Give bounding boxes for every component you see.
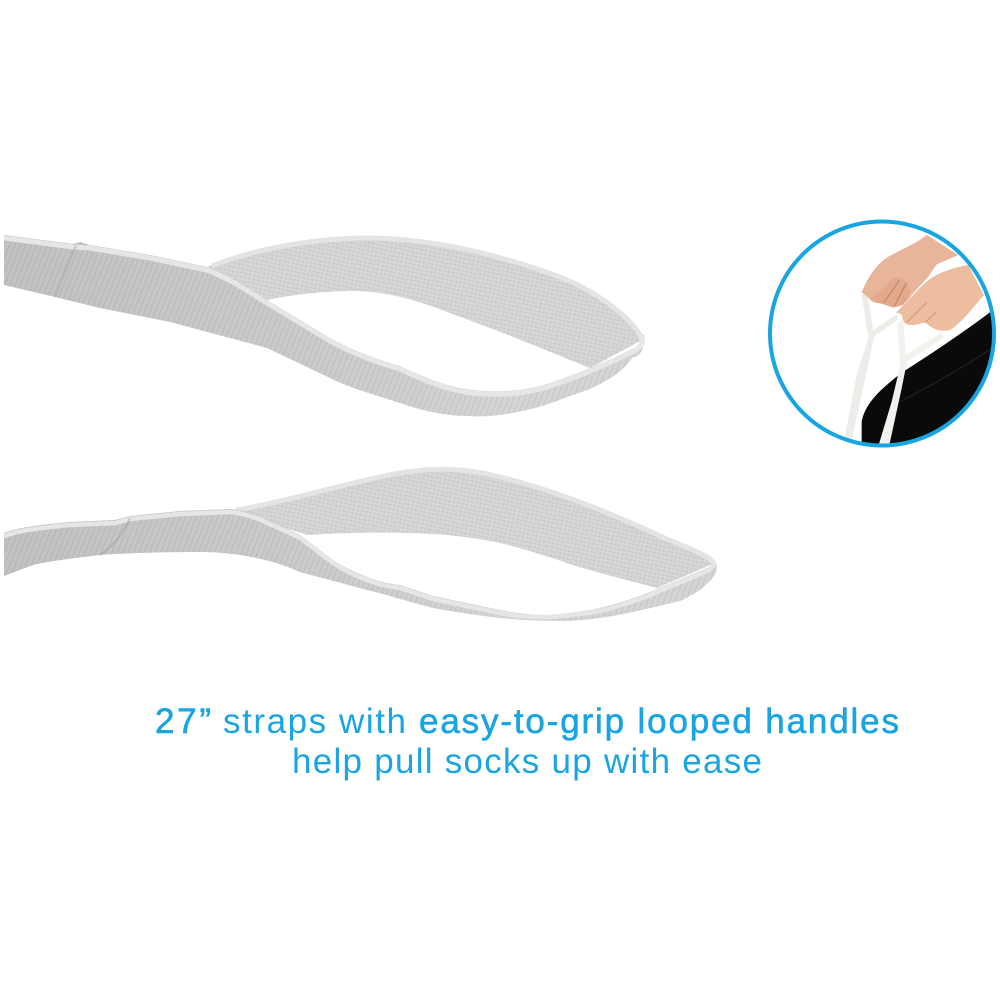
inset circle ring <box>770 222 994 446</box>
back arm and hand <box>862 235 958 307</box>
left strap <box>845 293 898 439</box>
front arm and hand <box>896 265 984 331</box>
caption line 1: 27” <box>155 702 211 741</box>
strap loop: bottom <box>4 468 717 621</box>
back band of bottom loop <box>232 468 715 588</box>
caption line 1: straps with <box>223 702 406 741</box>
seat cushion <box>862 311 1000 448</box>
caption line 1 <box>155 702 899 741</box>
inset photo: hands pulling straps <box>770 222 1000 448</box>
front band of top loop <box>4 235 644 416</box>
caption line 1: easy-to-grip looped handles <box>419 702 899 741</box>
back band of top loop <box>207 237 642 368</box>
strap loop: top <box>4 235 644 416</box>
caption <box>155 702 899 781</box>
right strap <box>879 317 944 445</box>
front band of bottom loop <box>4 509 717 621</box>
caption line 2: help pull socks up with ease <box>292 742 762 781</box>
inset photo contents <box>845 235 992 444</box>
back hand fingers <box>869 278 911 308</box>
